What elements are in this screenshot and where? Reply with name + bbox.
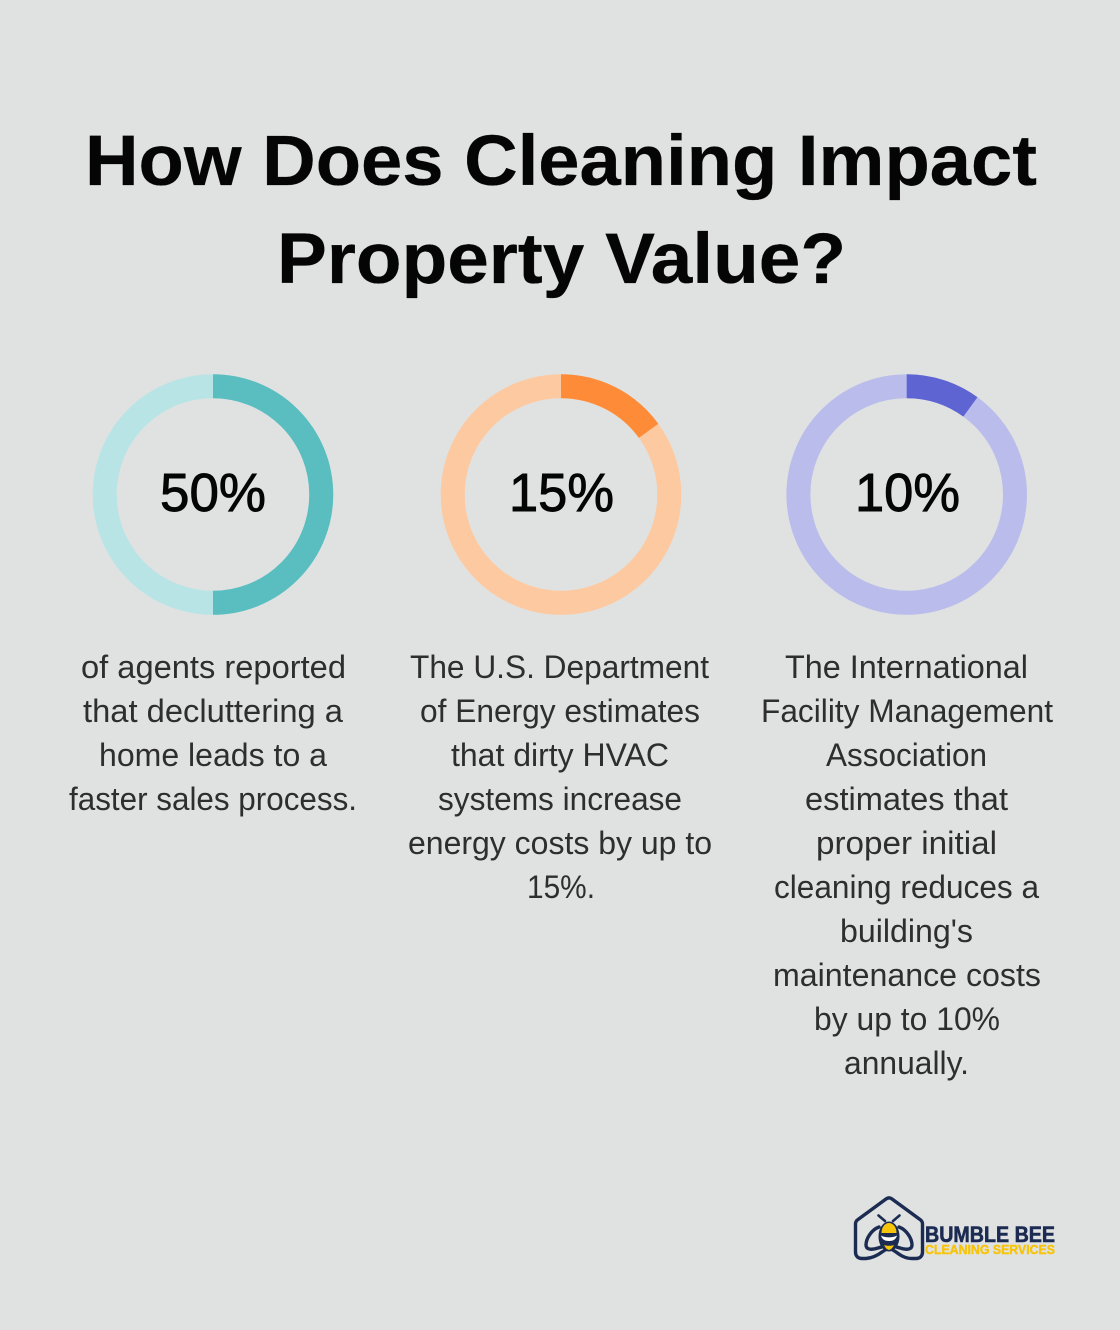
logo wordmark: CLEANING SERVICES: [925, 1243, 1055, 1257]
donut chart: 10%: [798, 386, 1015, 603]
logo wordmark: BUMBLE BEE: [925, 1222, 1055, 1247]
description: facility management: Facility Management: [761, 693, 1053, 729]
donut chart: 15%: [453, 386, 669, 603]
description: facility management: annually.: [844, 1045, 969, 1081]
description: agents: [69, 649, 357, 817]
description: agents: of agents reported: [81, 649, 346, 685]
title: Property Value?: [277, 220, 846, 299]
description: facility management: The International: [785, 649, 1028, 685]
description: facility management: Association: [826, 737, 987, 773]
description: facility management: [761, 649, 1053, 1081]
panel: 10% statistic: [761, 386, 1053, 1081]
description: facility management: building's: [840, 913, 973, 949]
description: agents: faster sales process.: [69, 781, 357, 817]
description: HVAC: [408, 649, 712, 905]
description: facility management: proper initial: [816, 825, 997, 861]
description: agents: home leads to a: [99, 737, 327, 773]
donut chart: 50%: [105, 386, 321, 603]
description: HVAC: of Energy estimates: [420, 693, 700, 729]
description: agents: that decluttering a: [83, 693, 343, 729]
description: HVAC: 15%.: [527, 869, 595, 905]
description: facility management: estimates that: [805, 781, 1008, 817]
description: facility management: maintenance costs: [773, 957, 1041, 993]
value: 10%: 10%: [855, 463, 960, 523]
panel: 15% statistic: [408, 386, 712, 905]
description: HVAC: that dirty HVAC: [451, 737, 669, 773]
icon: house with bee: [856, 1198, 922, 1258]
description: facility management: by up to 10%: [814, 1001, 1000, 1037]
value: 15%: 15%: [509, 463, 614, 523]
title: How Does Cleaning Impact: [85, 122, 1037, 201]
panel: 50% statistic: [69, 386, 357, 817]
value: 50%: 50%: [160, 463, 266, 523]
description: HVAC: energy costs by up to: [408, 825, 712, 861]
logo: Bumble Bee Cleaning Services: [856, 1198, 1055, 1258]
logo wordmark: [925, 1222, 1055, 1257]
description: HVAC: systems increase: [438, 781, 682, 817]
description: HVAC: The U.S. Department: [410, 649, 709, 685]
title: [85, 122, 1037, 299]
description: facility management: cleaning reduces a: [774, 869, 1039, 905]
